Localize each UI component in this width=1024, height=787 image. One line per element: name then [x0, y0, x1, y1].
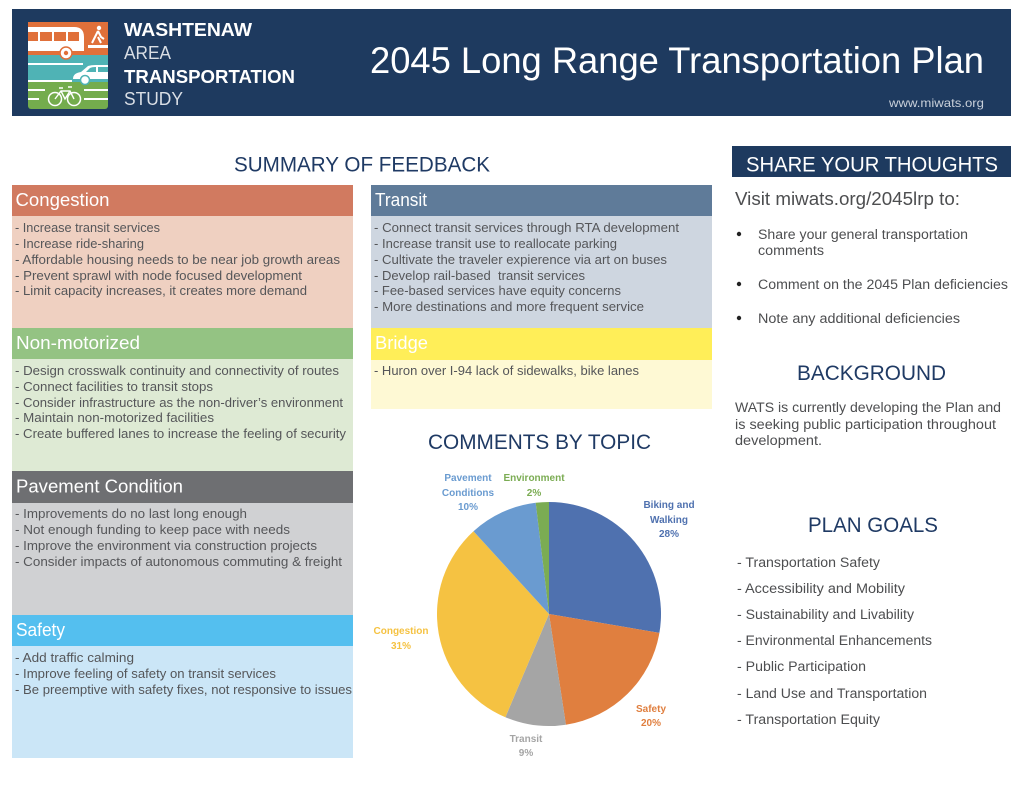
congestion comments: - Limit capacity increases, it creates more demand [15, 283, 307, 298]
list: plan goals: - Land Use and Transportation [737, 686, 927, 701]
icon: WATS logo [28, 22, 108, 109]
pavement comments: - Improvements do no last long enough [15, 506, 247, 521]
pavement comments [15, 506, 342, 569]
list: plan goals: - Transportation Equity [737, 712, 880, 727]
website url: www.miwats.org [888, 96, 984, 110]
heading: summary of feedback: SUMMARY OF FEEDBACK [234, 154, 490, 176]
pie label: congestion [374, 626, 428, 652]
pie label: biking and walking: Biking and [643, 500, 695, 511]
panel: safety [12, 615, 353, 758]
transit comments: - Increase transit use to reallocate parking [374, 236, 617, 251]
transit comments: - More destinations and more frequent service [374, 299, 644, 314]
non-motorized comments: - Maintain non-motorized facilities [15, 410, 215, 425]
heading: background: BACKGROUND [797, 362, 946, 385]
text: background: is seeking public participation throughout [735, 417, 996, 432]
pie label: pavement conditions [442, 473, 495, 513]
list: plan goals: - Transportation Safety [737, 555, 880, 570]
panel: transit [371, 185, 712, 328]
congestion comments: - Affordable housing needs to be near job growth areas [15, 252, 341, 267]
pie label: environment: 2% [527, 488, 541, 499]
bullet list: ways to comment: comments [758, 243, 824, 258]
text: background [735, 400, 1001, 448]
pie label: biking and walking: Walking [650, 515, 688, 526]
pie label: safety: Safety [636, 704, 666, 715]
text: visit instructions: Visit miwats.org/2045lrp to: [735, 189, 960, 209]
heading: safety: Safety [16, 620, 65, 640]
heading: transit: Transit [375, 190, 427, 210]
pie label: safety [636, 704, 666, 729]
congestion comments [15, 220, 341, 298]
safety comments [15, 650, 352, 697]
pavement comments: - Not enough funding to keep pace with needs [15, 522, 291, 537]
panel: congestion [12, 185, 353, 328]
pie label: pavement conditions: 10% [458, 502, 478, 513]
title: 2045 Long Range Transportation Plan [370, 40, 984, 81]
logo wordmark: STUDY [124, 89, 183, 109]
transit comments: - Develop rail-based transit services [374, 268, 585, 283]
panel: non-motorized [12, 328, 353, 471]
pie label: pavement conditions: Pavement [444, 473, 492, 484]
transit comments: - Connect transit services through RTA development [374, 220, 679, 235]
heading: congestion: Congestion [16, 190, 110, 210]
bullet list: ways to comment: Share your general transportation [758, 227, 968, 242]
transit comments: - Fee-based services have equity concerns [374, 283, 621, 298]
pie chart: comments by topic [374, 473, 695, 759]
bullet list: ways to comment [737, 227, 1008, 326]
non-motorized comments: - Connect facilities to transit stops [15, 379, 214, 394]
pie label: biking and walking: 28% [659, 529, 679, 540]
logo wordmark [124, 20, 295, 109]
panel: pavement condition [12, 471, 353, 615]
pie label: environment [503, 473, 565, 499]
safety comments: - Add traffic calming [15, 650, 134, 665]
bridge comment: - Huron over I-94 lack of sidewalks, bike lanes [374, 363, 639, 378]
heading: plan goals: PLAN GOALS [808, 514, 938, 537]
transit comments: - Cultivate the traveler expierence via art on buses [374, 252, 667, 267]
non-motorized comments: - Consider infrastructure as the non-driver’s environment [15, 395, 343, 410]
congestion comments: - Prevent sprawl with node focused development [15, 268, 302, 283]
pie label: congestion: Congestion [374, 626, 428, 637]
heading: non-motorized: Non-motorized [16, 333, 140, 353]
pavement comments: - Consider impacts of autonomous commuting & freight [15, 554, 342, 569]
text: background: development. [735, 433, 822, 448]
heading: bridge: Bridge [375, 333, 428, 353]
non-motorized comments [15, 363, 347, 441]
safety comments: - Improve feeling of safety on transit services [15, 666, 276, 681]
list: plan goals: - Sustainability and Livability [737, 607, 914, 622]
pie label: transit: Transit [510, 734, 543, 745]
heading: pavement condition: Pavement Condition [16, 476, 183, 496]
heading: share your thoughts: SHARE YOUR THOUGHTS [746, 154, 998, 176]
pie label: biking and walking [643, 500, 695, 540]
pie label: transit [510, 734, 543, 759]
pie label: safety: 20% [641, 718, 661, 729]
pie label: environment: Environment [503, 473, 565, 484]
congestion comments: - Increase ride-sharing [15, 236, 144, 251]
heading: share your thoughts [732, 146, 1011, 177]
transit comments [374, 220, 679, 314]
logo wordmark: TRANSPORTATION [124, 67, 295, 87]
pie label: transit: 9% [519, 748, 533, 759]
logo wordmark: WASHTENAW [124, 20, 252, 40]
pie label: pavement conditions: Conditions [442, 488, 495, 499]
text: background: WATS is currently developing the Plan and [735, 400, 1001, 415]
list: plan goals: - Accessibility and Mobility [737, 581, 905, 596]
congestion comments: - Increase transit services [15, 220, 160, 235]
header banner [12, 9, 1011, 116]
pavement comments: - Improve the environment via construction projects [15, 538, 317, 553]
pie label: congestion: 31% [391, 641, 411, 652]
bullet list: ways to comment: Comment on the 2045 Plan deficiencies [758, 277, 1008, 292]
safety comments: - Be preemptive with safety fixes, not responsive to issues [15, 682, 352, 697]
bullet list: ways to comment: Note any additional deficiencies [758, 311, 960, 326]
list: plan goals: - Public Participation [737, 659, 866, 674]
logo wordmark: AREA [124, 43, 171, 63]
non-motorized comments: - Create buffered lanes to increase the feeling of security [15, 426, 347, 441]
list: plan goals [737, 555, 932, 727]
list: plan goals: - Environmental Enhancements [737, 633, 932, 648]
non-motorized comments: - Design crosswalk continuity and connectivity of routes [15, 363, 339, 378]
panel: bridge [371, 328, 712, 409]
heading: comments by topic: COMMENTS BY TOPIC [428, 431, 651, 454]
